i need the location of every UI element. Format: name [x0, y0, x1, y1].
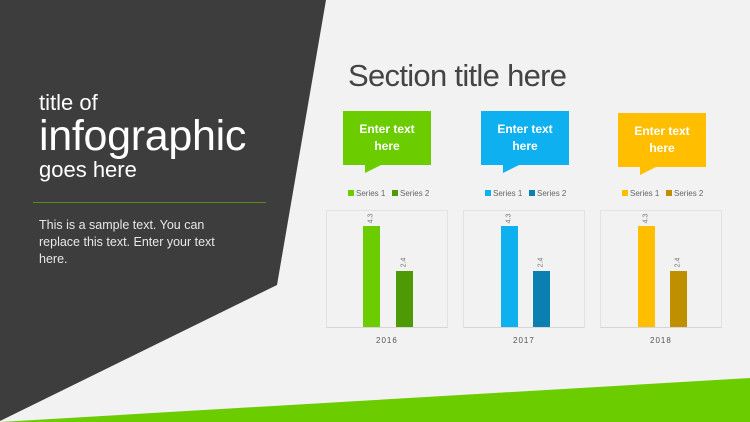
- title: infographic: [39, 112, 246, 160]
- chart: 2.4: [537, 258, 544, 267]
- panel: 2018: [600, 113, 722, 345]
- callout green: [343, 111, 431, 165]
- callout yellow: Enter text: [634, 124, 690, 138]
- chart: 4.3: [642, 214, 649, 223]
- legend: Series 1 Series 2: [630, 189, 703, 198]
- body text: This is a sample text. You can replace this text. Enter your text here.: [39, 218, 215, 266]
- chart: 4.3: [367, 214, 374, 223]
- chart: [326, 210, 448, 328]
- panel: 2016: [326, 111, 448, 345]
- callout yellow: [618, 113, 706, 167]
- callout green: Enter text: [359, 122, 415, 136]
- legend: Series 1 Series 2: [356, 189, 429, 198]
- title: title of: [39, 90, 98, 115]
- chart: [600, 210, 722, 328]
- section title: Section title here: [348, 58, 566, 93]
- callout blue: [481, 111, 569, 165]
- year: 2018: [650, 336, 672, 345]
- chart: 2.4: [674, 258, 681, 267]
- year: 2016: [376, 336, 398, 345]
- chart: 4.3: [505, 214, 512, 223]
- chart: [463, 210, 585, 328]
- panel: 2017: [463, 111, 585, 345]
- divider: [33, 202, 266, 203]
- callout yellow: here: [649, 141, 675, 155]
- legend: Series 1 Series 2: [493, 189, 566, 198]
- green band: [0, 378, 750, 422]
- callout blue: here: [512, 139, 538, 153]
- dark panel: [0, 0, 326, 421]
- title: goes here: [39, 157, 137, 182]
- year: 2017: [513, 336, 535, 345]
- title: [39, 90, 246, 182]
- callout green: here: [374, 139, 400, 153]
- chart: 2.4: [400, 258, 407, 267]
- callout blue: Enter text: [497, 122, 553, 136]
